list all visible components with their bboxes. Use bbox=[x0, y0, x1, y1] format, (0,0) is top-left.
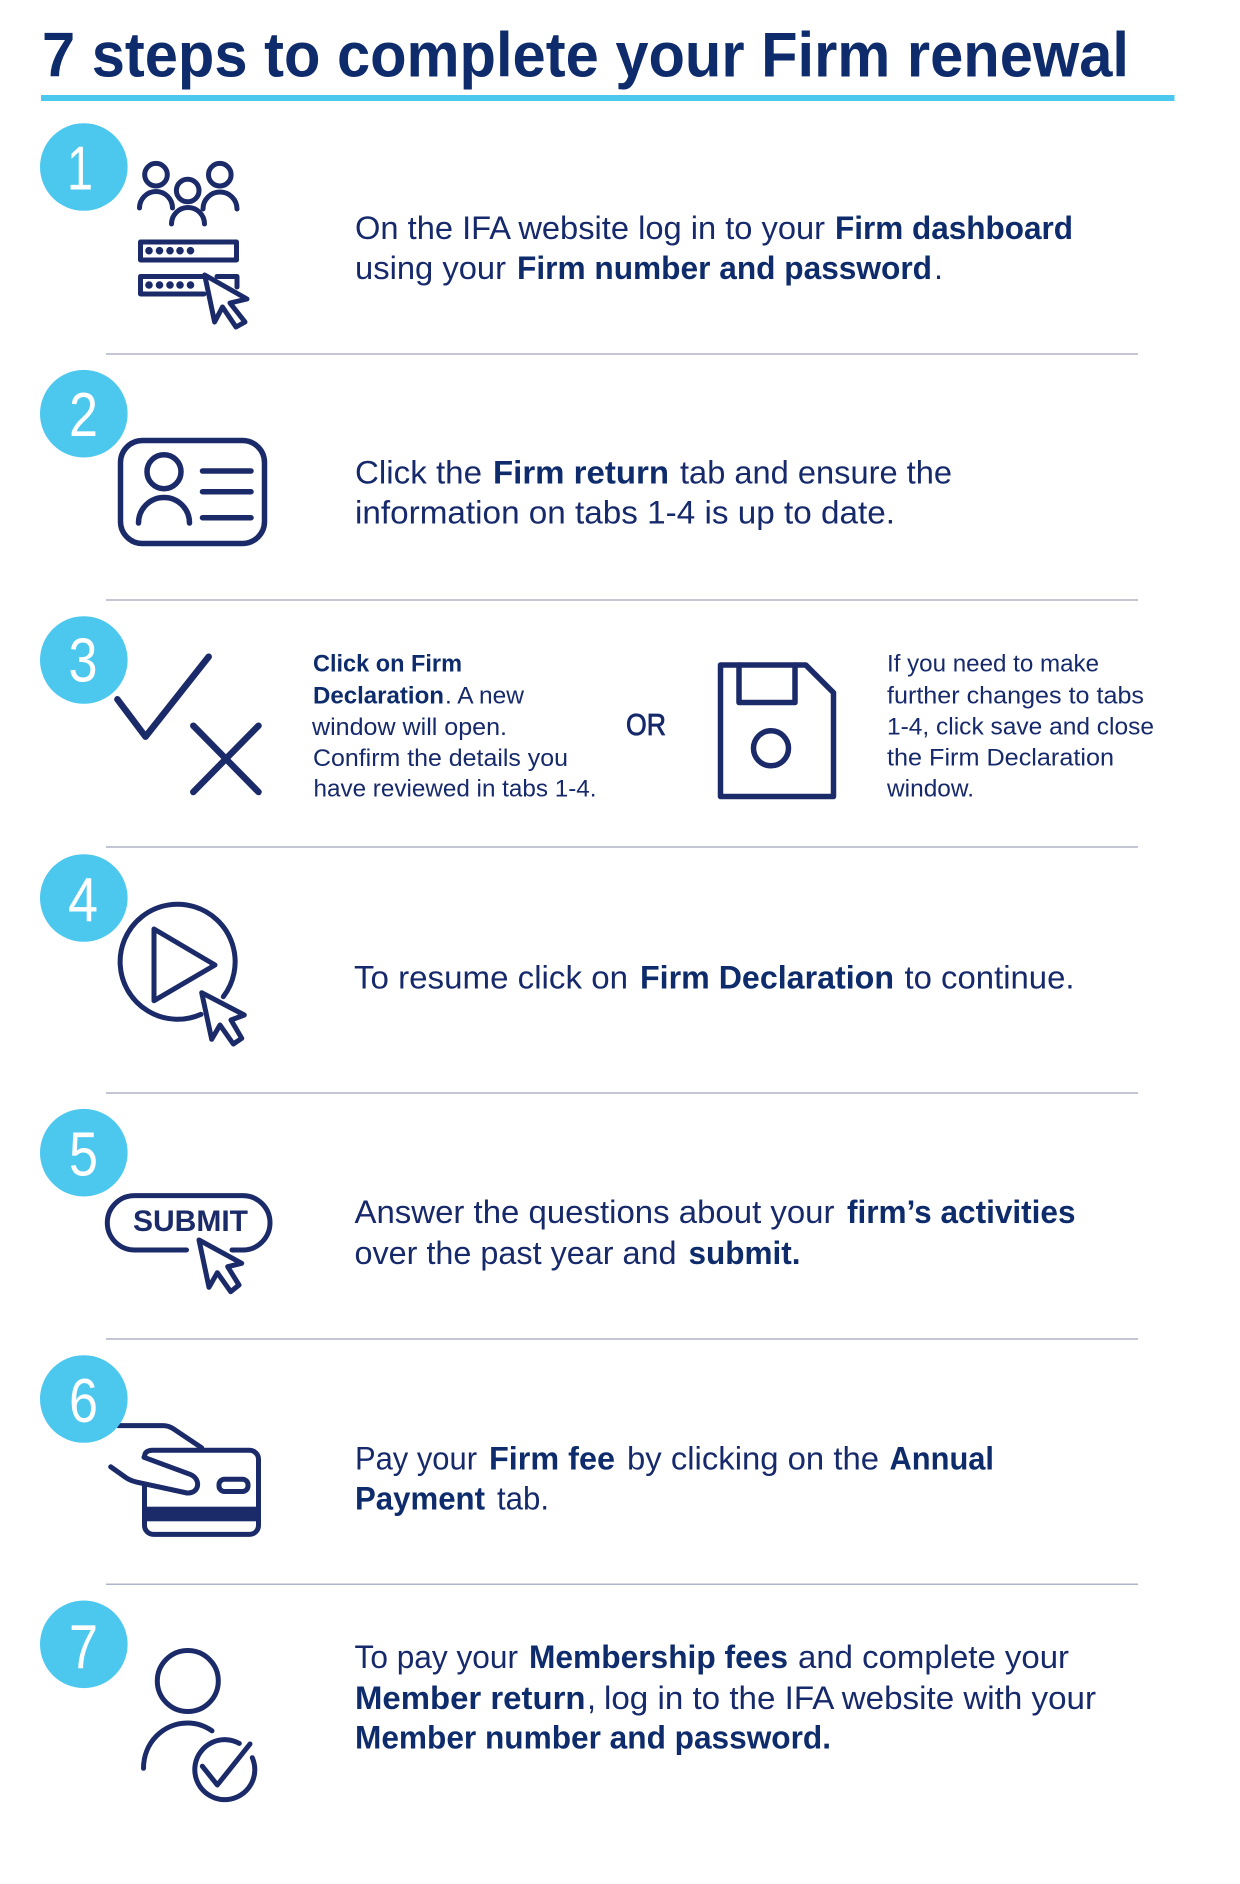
text: step 2: Firm return bbox=[493, 454, 669, 490]
text: step 2: tab and ensure the bbox=[680, 454, 952, 490]
text: step 4: to continue. bbox=[904, 959, 1074, 995]
badge: number 6 bbox=[40, 1355, 128, 1443]
text: step 7: and complete your bbox=[798, 1639, 1069, 1675]
text: step 7: log in to the IFA website with your bbox=[604, 1680, 1096, 1716]
badge: number 4: 4 bbox=[68, 866, 98, 935]
badge: number 7 bbox=[40, 1600, 128, 1688]
badge: number 7: 7 bbox=[69, 1613, 98, 1682]
icon: play button with cursor bbox=[120, 904, 244, 1044]
panel: step 1 bbox=[40, 123, 1073, 327]
badge: number 1: 1 bbox=[67, 135, 93, 204]
icon: people and login fields bbox=[140, 163, 247, 327]
text: step 1: Firm dashboard bbox=[835, 210, 1073, 246]
badge: number 4 bbox=[40, 854, 128, 942]
icon: ID card bbox=[120, 440, 264, 544]
panel: step 4 bbox=[40, 854, 1075, 1044]
text: step 1: . bbox=[934, 250, 943, 286]
icon: tick and cross bbox=[117, 657, 259, 792]
badge: number 5 bbox=[40, 1109, 128, 1196]
icon: submit button with cursor: SUBMIT bbox=[133, 1205, 248, 1238]
text: step 7: , bbox=[587, 1680, 596, 1716]
badge: number 6: 6 bbox=[69, 1367, 98, 1436]
text: step 1 bbox=[355, 210, 1073, 286]
text: step 5 bbox=[354, 1194, 1076, 1271]
text: step 2: Click the bbox=[355, 454, 482, 490]
text: step 1: Firm number and password bbox=[517, 250, 932, 286]
badge: number 2: 2 bbox=[69, 381, 98, 450]
panel: step 6 bbox=[40, 1355, 994, 1534]
badge: number 2 bbox=[40, 370, 128, 458]
text: step 7: Member return bbox=[355, 1680, 586, 1716]
text: step 7: Member number and password. bbox=[355, 1719, 831, 1755]
icon: hand holding bank card bbox=[111, 1426, 258, 1534]
panel: step 7 bbox=[40, 1600, 1096, 1800]
text: step 6: Firm fee bbox=[489, 1440, 615, 1476]
text: step 3 first option: Click on Firm bbox=[313, 651, 462, 678]
text: step 6: by clicking on the bbox=[627, 1440, 879, 1476]
text: step 5: firm’s activities bbox=[847, 1194, 1076, 1230]
text: step 6: tab. bbox=[497, 1480, 549, 1516]
text: step 3 second option bbox=[886, 651, 1154, 803]
title: 7 steps to complete your Firm renewal bbox=[42, 21, 1129, 91]
text: step 2: information on tabs 1-4 is up to date. bbox=[355, 494, 895, 530]
text: step 2 bbox=[355, 454, 952, 530]
text: step 4 bbox=[354, 959, 1074, 995]
text: step 6: Annual bbox=[890, 1440, 994, 1476]
text: step 6: Payment bbox=[355, 1480, 485, 1516]
text: step 7: To pay your bbox=[354, 1639, 518, 1675]
icon: save disk bbox=[720, 665, 834, 796]
text: step 4: To resume click on bbox=[354, 959, 628, 995]
text: step 3 first option: Declaration bbox=[313, 682, 444, 709]
icon: submit button with cursor bbox=[107, 1196, 270, 1292]
text: step 6: Pay your bbox=[355, 1440, 477, 1476]
text: step 7 bbox=[354, 1639, 1096, 1755]
badge: number 3: 3 bbox=[68, 626, 98, 696]
text: step 3 second option: If you need to make bbox=[887, 651, 1099, 678]
text: step 3 second option: window. bbox=[886, 776, 974, 803]
badge: number 5: 5 bbox=[69, 1120, 98, 1190]
panel: step 5 bbox=[40, 1109, 1076, 1292]
text: step 3 first option: . A new bbox=[445, 682, 524, 709]
text: step 3 second option: further changes to tabs bbox=[887, 682, 1144, 709]
text: step 3 first option: Confirm the details you bbox=[313, 745, 568, 772]
panel: step 2 bbox=[40, 370, 952, 544]
panel: step 3 bbox=[40, 616, 1154, 803]
text: step 5: submit. bbox=[688, 1235, 800, 1271]
text: step 3 first option: have reviewed in tabs 1-4. bbox=[314, 776, 596, 803]
text: step 4: Firm Declaration bbox=[640, 959, 894, 995]
text: step 7: Membership fees bbox=[529, 1639, 788, 1675]
text: step 6 bbox=[355, 1440, 994, 1516]
text: step 1: On the IFA website log in to your bbox=[355, 210, 825, 246]
badge: number 1 bbox=[40, 123, 128, 211]
text: step 3 second option: the Firm Declaration bbox=[887, 745, 1114, 772]
icon: member with check mark bbox=[144, 1650, 255, 1800]
badge: number 3 bbox=[40, 616, 128, 704]
text: step 3 first option: window will open. bbox=[311, 714, 507, 741]
text: step 5: over the past year and bbox=[354, 1235, 676, 1271]
text: step 3 first option bbox=[311, 651, 596, 803]
text: step 3 second option: 1-4, click save and close bbox=[887, 713, 1154, 740]
text: step 1: using your bbox=[355, 250, 506, 286]
text: OR: OR bbox=[626, 707, 666, 742]
text: step 5: Answer the questions about your bbox=[354, 1194, 835, 1230]
